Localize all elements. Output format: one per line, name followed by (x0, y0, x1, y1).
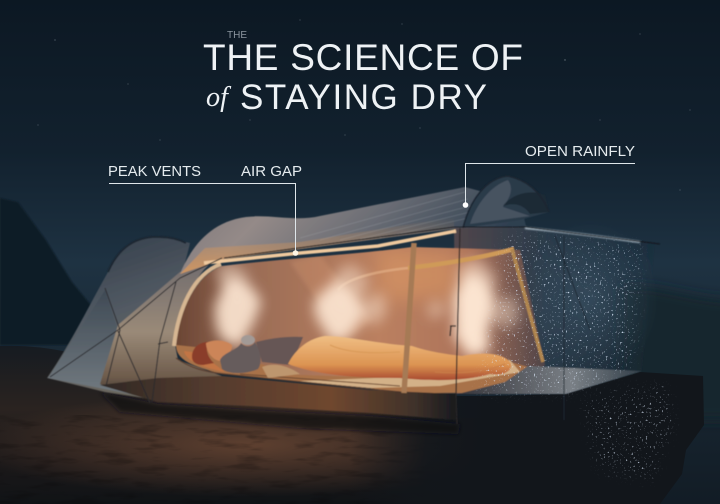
right side poles (555, 236, 590, 420)
window interior (176, 247, 545, 393)
rear right awning zone (454, 227, 655, 394)
face (206, 341, 232, 361)
hair (192, 342, 214, 365)
tent (47, 176, 660, 434)
shadow under tent (100, 392, 460, 434)
sleeping bag (288, 336, 511, 380)
vertical door strut (404, 243, 414, 393)
awning highlight (525, 228, 640, 242)
title line two: STAYING DRY (240, 78, 487, 117)
floor sill (176, 358, 400, 392)
tent poles left (50, 258, 222, 403)
callout: peak vents and air gap (108, 164, 302, 256)
script of: of (206, 82, 231, 113)
arm (220, 342, 261, 373)
clip (450, 326, 456, 336)
cliff edge right (350, 372, 704, 504)
mattress (176, 345, 540, 396)
callout: peak vents and air gap: AIR GAP (241, 164, 302, 180)
callout: open rainfly: OPEN RAINFLY (525, 144, 635, 160)
top rail (204, 231, 456, 263)
back dome (47, 237, 190, 400)
hand sleeve (241, 335, 255, 345)
callout: open rainfly (463, 144, 635, 208)
title line one: THE SCIENCE OF (203, 37, 523, 78)
ground (0, 346, 680, 504)
second rail (408, 249, 514, 268)
interior overlays (176, 250, 540, 396)
body (256, 337, 303, 365)
window frame (174, 264, 221, 346)
callout: peak vents and air gap: PEAK VENTS (108, 164, 201, 180)
stars (38, 20, 690, 190)
door pole (456, 228, 460, 424)
fly warm underglow (180, 217, 454, 274)
wet floor (458, 366, 642, 394)
right strut (512, 249, 543, 362)
fly hood vent (463, 176, 549, 228)
fly seams (300, 192, 470, 240)
side panel (100, 262, 222, 402)
steam plume 2 (316, 267, 386, 340)
small overline: THE (227, 30, 247, 41)
back dome dark arc (108, 237, 186, 272)
tent base (100, 376, 456, 420)
title (203, 30, 523, 117)
person (192, 335, 303, 378)
steam plume 3 (426, 260, 518, 355)
ridge line (224, 227, 660, 258)
distant hills right (620, 286, 720, 420)
main rainfly (180, 187, 526, 274)
left vestibule panel (48, 290, 135, 395)
rain speckles (470, 225, 680, 495)
mountain silhouette left (0, 198, 118, 345)
pillow fold (262, 365, 300, 378)
steam plume 1 (215, 262, 257, 346)
rear arch (342, 266, 408, 286)
